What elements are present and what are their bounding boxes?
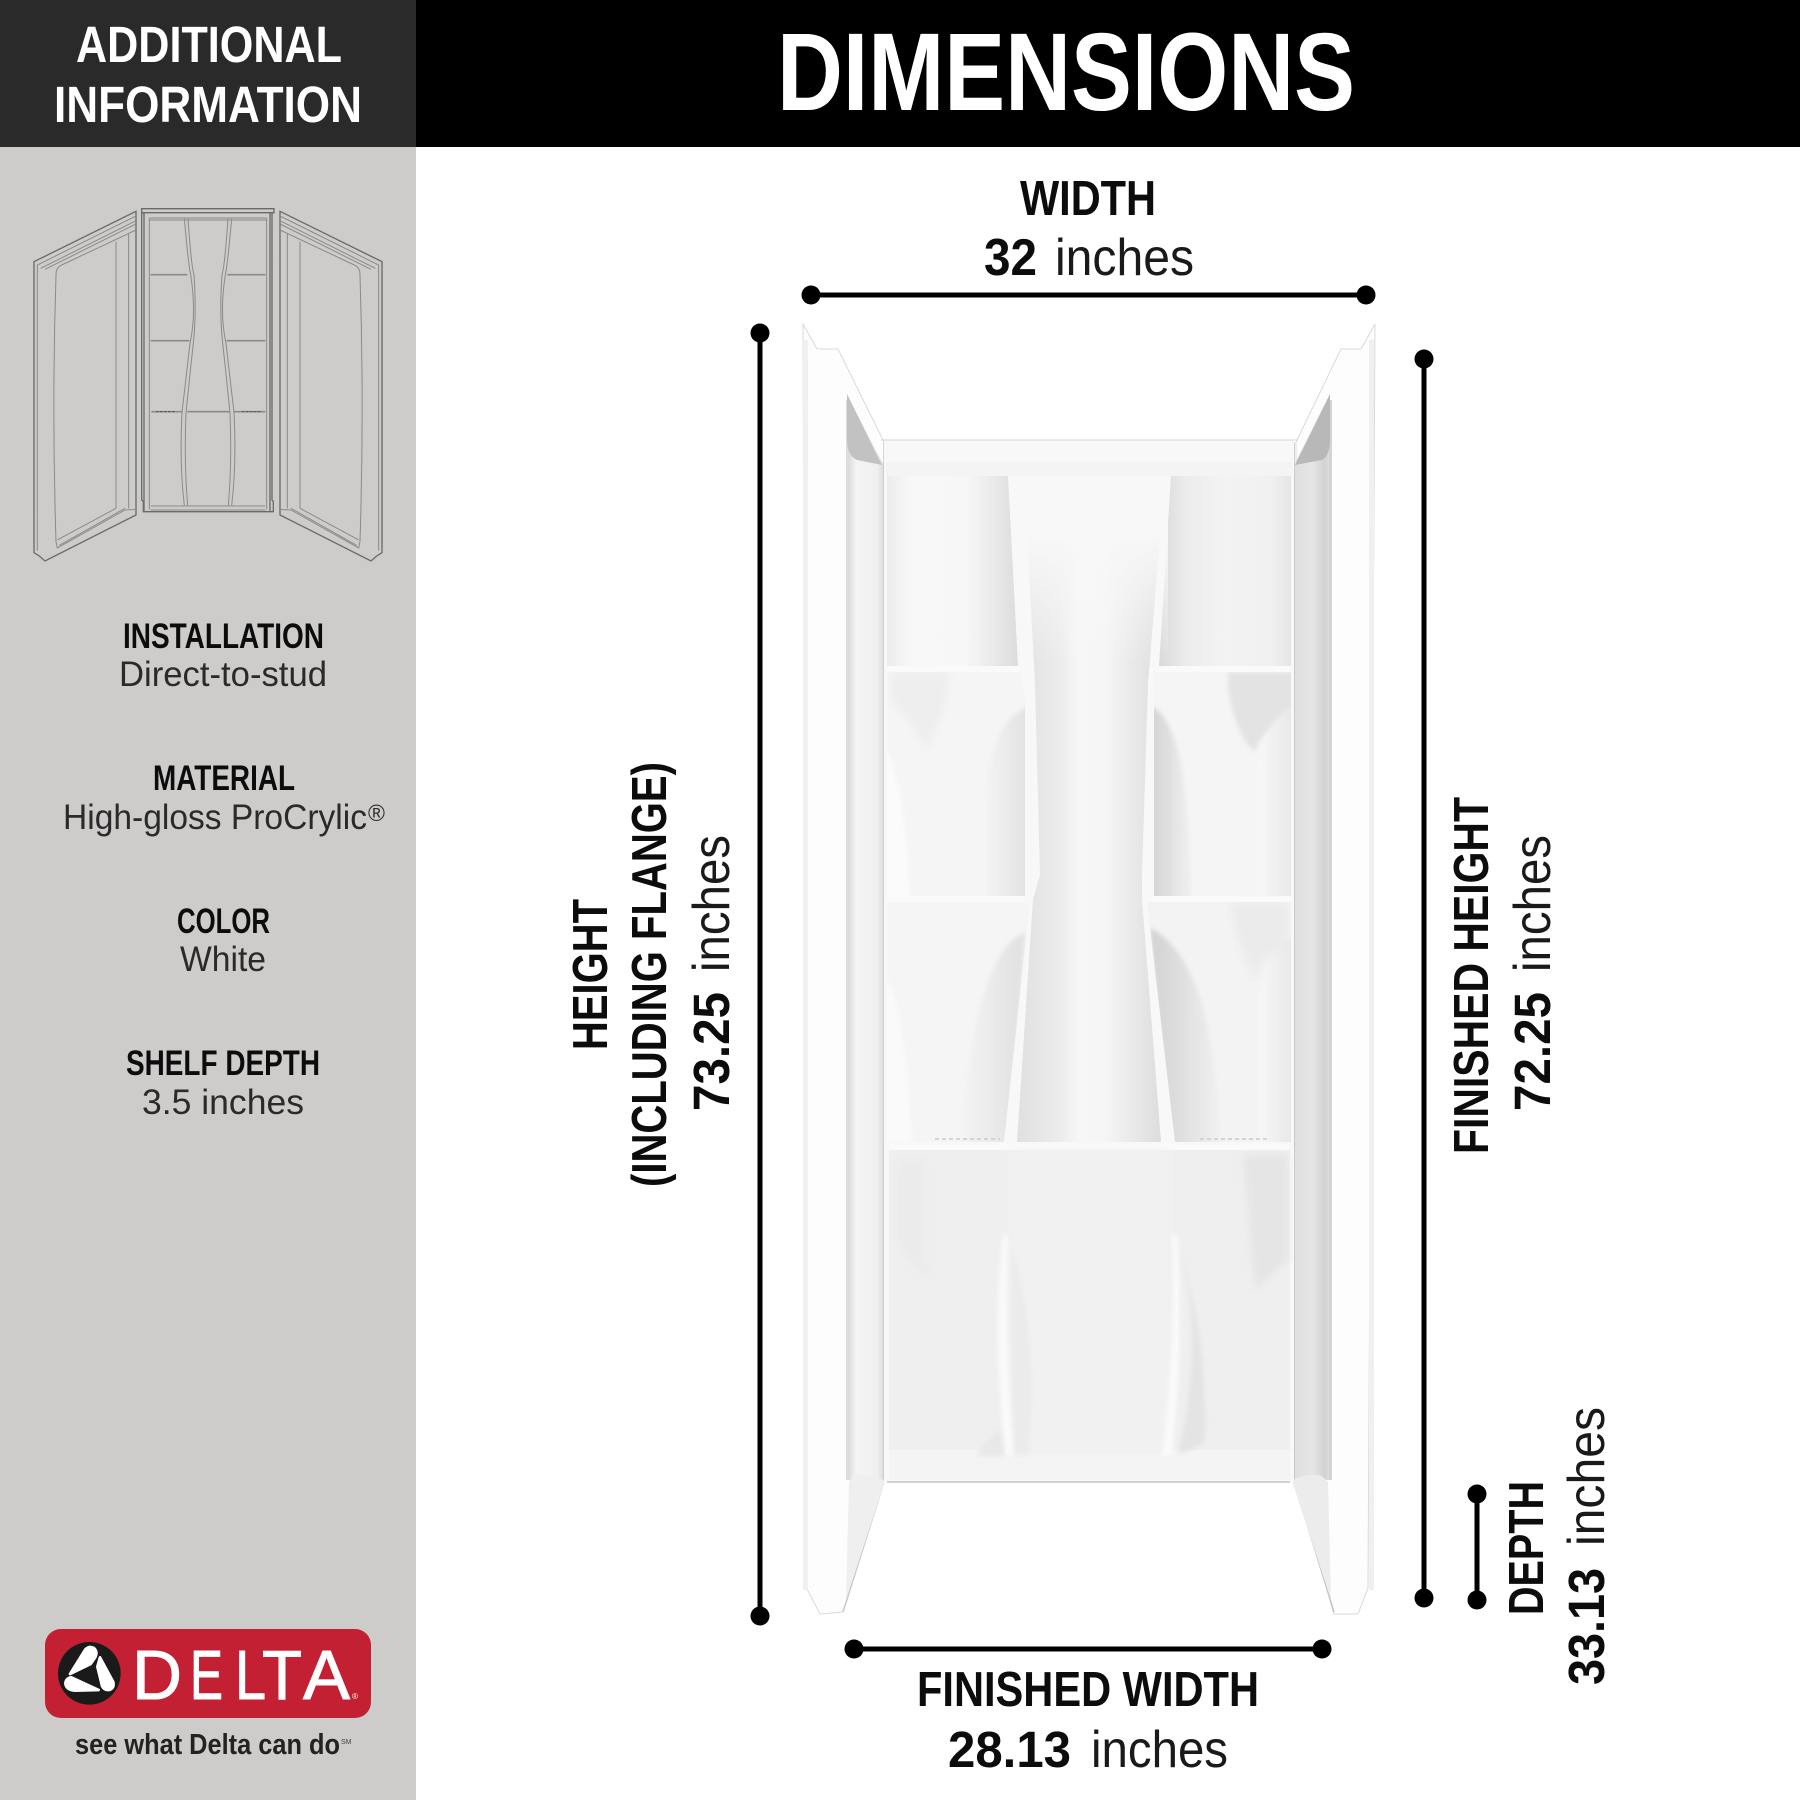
- label: width: [984, 172, 1194, 287]
- spec: installation: Direct-to-stud: [119, 655, 327, 694]
- spec: color: White: [180, 940, 266, 979]
- label: finished width: FINISHED WIDTH: [917, 1663, 1259, 1717]
- arrow: width dimension line: [802, 286, 1376, 304]
- label: width: inches: [1055, 229, 1194, 287]
- arrow: finished height dimension line: [1414, 350, 1434, 1608]
- centre wall with shelves: [142, 209, 274, 512]
- upper left shelf recess: [887, 476, 1018, 666]
- lower right shelf recess: [1147, 902, 1295, 1146]
- label: height including flange: (INCLUDING FLANGE): [623, 762, 677, 1187]
- label: finished width: [917, 1663, 1259, 1779]
- sidebar background panel: [0, 0, 416, 1800]
- label: finished height: inches: [1504, 835, 1562, 972]
- header: additional information: ADDITIONAL: [76, 16, 342, 73]
- header: additional information: [0, 0, 416, 147]
- spec: installation: [119, 617, 327, 694]
- header: dimensions title: [416, 0, 1800, 147]
- middle left shelf recess: [892, 674, 1025, 896]
- spec: shelf depth: 3.5 inches: [142, 1083, 304, 1122]
- header: additional information: INFORMATION: [54, 76, 362, 133]
- spec: material: [63, 759, 385, 837]
- spec: color: COLOR: [177, 902, 270, 941]
- label: finished height: 72.25: [1504, 992, 1561, 1111]
- spec: shelf depth: SHELF DEPTH: [126, 1044, 320, 1083]
- lower left shelf recess: [935, 933, 1026, 1142]
- label: depth: inches: [1558, 1407, 1616, 1546]
- central column: [1017, 500, 1163, 1142]
- arrow: finished width dimension line: [844, 1640, 1332, 1658]
- logo: Delta: ®: [352, 1692, 358, 1701]
- back wall panel: [880, 440, 1298, 1482]
- shelf ledges: [887, 666, 1291, 1150]
- label: width: 32: [984, 229, 1037, 287]
- arrow: height dimension line: [750, 324, 770, 1626]
- spec: material: ®: [368, 800, 385, 826]
- spec: shelf depth: [126, 1044, 320, 1122]
- upper right shelf recess: [1159, 476, 1291, 666]
- label: depth: 33.13: [1558, 1568, 1615, 1685]
- spec: material: MATERIAL: [153, 759, 295, 798]
- logo: Delta: T: [262, 1636, 302, 1714]
- label: height including flange: [564, 762, 741, 1187]
- label: depth: [1500, 1407, 1616, 1685]
- label: finished width: inches: [1091, 1721, 1228, 1779]
- left wall panel: [803, 324, 885, 1614]
- label: finished height: [1445, 797, 1562, 1154]
- logo: Delta: [45, 1629, 371, 1718]
- label: finished height: FINISHED HEIGHT: [1445, 797, 1499, 1154]
- lower wall panel: [889, 1150, 1290, 1480]
- arrow: depth dimension line: [1468, 1484, 1486, 1610]
- right wall panel: [1292, 324, 1375, 1614]
- logo: Delta: L: [235, 1636, 266, 1714]
- label: height including flange: HEIGHT: [564, 899, 618, 1050]
- logo: Delta: D: [132, 1636, 182, 1714]
- label: height including flange: inches: [683, 835, 741, 972]
- icon: Delta triangle mark: [58, 1642, 121, 1705]
- label: width: WIDTH: [1020, 172, 1156, 226]
- logo tagline: see what Delta can do: [75, 1729, 340, 1761]
- logo: Delta: A: [303, 1636, 350, 1714]
- label: finished width: 28.13: [948, 1721, 1071, 1778]
- header: dimensions title: DIMENSIONS: [777, 11, 1355, 134]
- logo: Delta: E: [190, 1636, 223, 1714]
- left wall outline: [34, 211, 136, 561]
- spec: color: [177, 902, 270, 979]
- shower wall product image: [803, 324, 1375, 1614]
- label: height including flange: 73.25: [683, 992, 740, 1111]
- icon: shower wall line drawing: [34, 209, 382, 561]
- label: depth: DEPTH: [1500, 1481, 1554, 1615]
- middle right shelf recess: [1150, 672, 1295, 900]
- spec: material: High-gloss ProCrylic: [63, 798, 367, 837]
- logo tagline: SM: [341, 1739, 352, 1746]
- right wall outline: [280, 211, 382, 561]
- spec: installation: INSTALLATION: [123, 617, 324, 656]
